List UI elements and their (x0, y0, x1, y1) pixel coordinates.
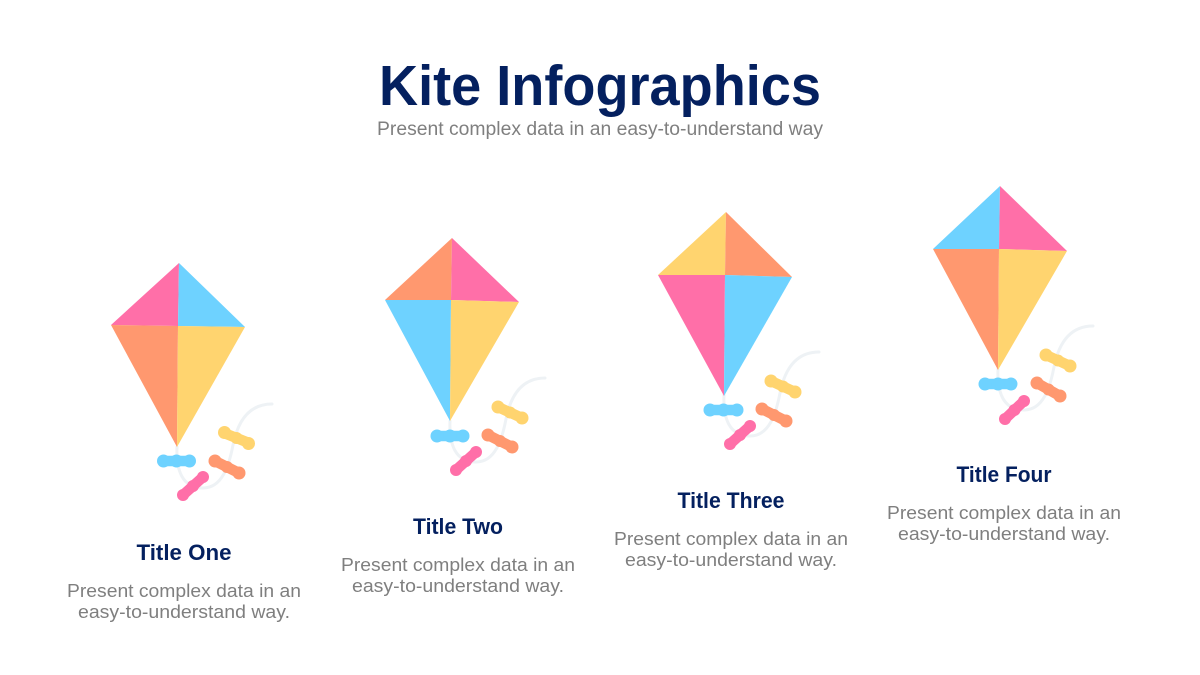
title: Kite Infographics (379, 54, 821, 118)
text: description four: easy-to-understand way. (898, 524, 1110, 544)
icon: kite one (111, 263, 272, 501)
text: description three: Present complex data in an (614, 529, 848, 549)
heading: title four: Title Four (956, 462, 1052, 487)
text: description four: Present complex data in an (887, 503, 1121, 523)
icon: kite four (933, 186, 1093, 425)
panel: kite three (614, 212, 848, 570)
text: description one: Present complex data in an (67, 581, 301, 601)
text: description three: easy-to-understand way. (625, 550, 837, 570)
panel: kite two (341, 238, 575, 596)
icon: kite two (385, 238, 545, 476)
text: description one: easy-to-understand way. (78, 602, 290, 622)
icon: kite three (658, 212, 819, 450)
panel: kite one (67, 263, 301, 622)
text: description two: Present complex data in an (341, 555, 575, 575)
text: description one (67, 581, 301, 622)
text: description four (887, 503, 1121, 544)
heading: title two: Title Two (413, 514, 503, 539)
text: description two (341, 555, 575, 596)
heading: title one: Title One (136, 540, 232, 565)
panel: kite four (887, 186, 1121, 544)
text: description three (614, 529, 848, 570)
subtitle: Present complex data in an easy-to-understand way (377, 119, 823, 140)
heading: title three: Title Three (678, 488, 784, 513)
text: description two: easy-to-understand way. (352, 576, 564, 596)
